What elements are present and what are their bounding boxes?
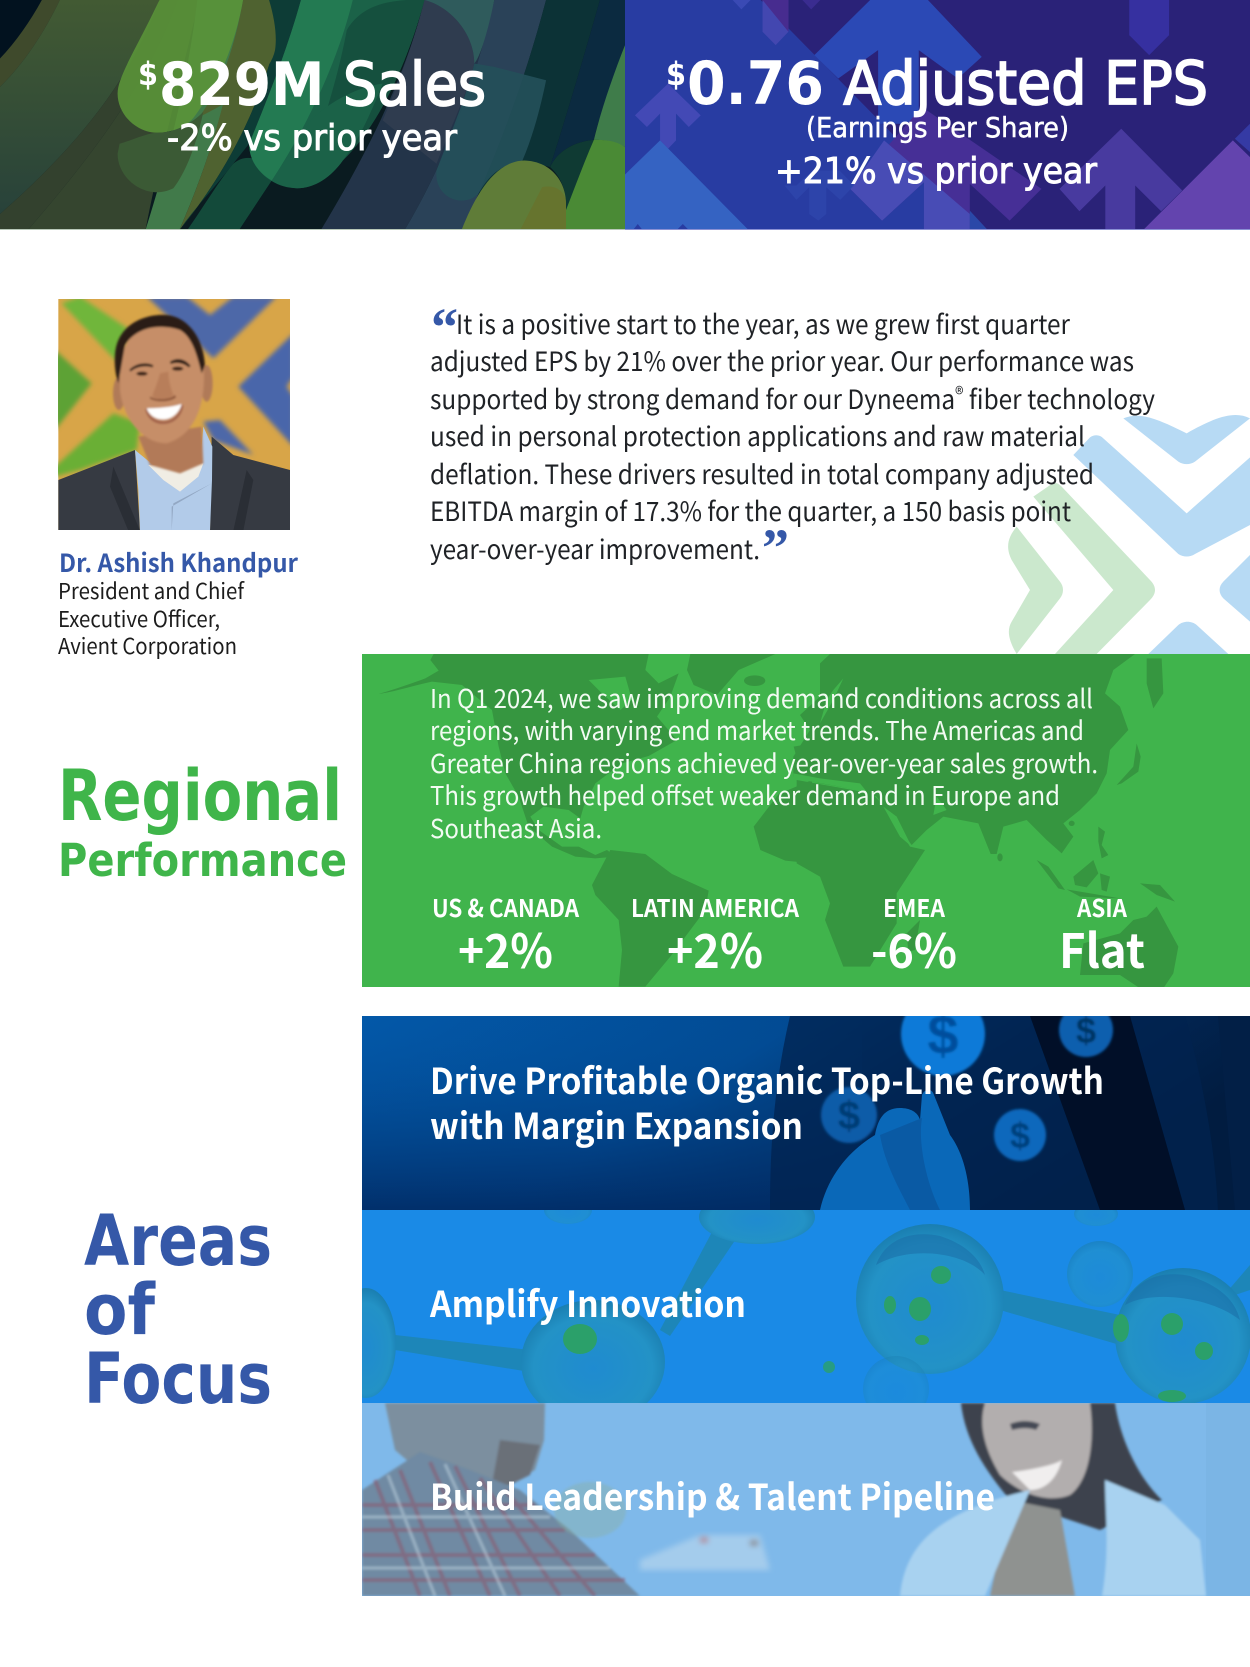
- CEO quote: fiber technology: [963, 378, 1155, 417]
- face: [120, 320, 204, 443]
- CEO quote: deflation. These drivers resulted in total company adjusted: [430, 453, 1094, 492]
- smile: [147, 404, 182, 419]
- stat: EMEA: -6%: [871, 913, 957, 982]
- regional summary text: Greater China regions achieved year-over-year sales growth.: [430, 744, 1098, 781]
- focus area title: Amplify Innovation: [429, 1276, 746, 1328]
- CEO quote: [430, 297, 1155, 578]
- green pill: [249, 0, 425, 188]
- centre arrow: [889, 110, 1042, 220]
- title line 2: Executive Officer,: [58, 602, 220, 634]
- CEO quote: It is a positive start to the year, as we grew first quarter: [456, 303, 1071, 342]
- CEO quote: year-over-year improvement.: [430, 528, 760, 567]
- superscript dollar sign: $: [666, 55, 686, 93]
- opening quote mark: “: [431, 297, 458, 357]
- regional summary text: [430, 679, 1098, 846]
- focus area title: Drive Profitable Organic Top-Line Growth: [430, 1053, 1104, 1105]
- light triangle: [625, 140, 749, 230]
- stat: US and Canada: [434, 898, 580, 968]
- heading: regional performance: Regional: [58, 755, 342, 837]
- panel: focus area talent: [362, 1403, 1250, 1596]
- stat: Asia: ASIA: [1076, 889, 1128, 924]
- lower olive pill: [118, 112, 203, 192]
- CEO quote: EBITDA margin of 17.3% for the quarter, a 150 basis point: [430, 490, 1071, 529]
- EPS change: +21% vs prior year: [775, 151, 1097, 192]
- molecule connectors: [395, 1232, 1250, 1372]
- slate pill: [383, 0, 474, 164]
- panel: regional performance: [362, 654, 1250, 988]
- headline: sales figure: [138, 50, 486, 159]
- CEO quote: supported by strong demand for our Dyneema: [430, 378, 1000, 417]
- focus area title: Build Leadership & Talent Pipeline: [430, 1469, 995, 1521]
- stat: EMEA: EMEA: [883, 889, 946, 924]
- world map: [379, 654, 1178, 988]
- panel: sales header: [0, 0, 625, 230]
- sales change: -2% vs prior year: [167, 118, 457, 159]
- stat: Asia: Flat: [1059, 913, 1145, 982]
- closing quote mark: ”: [762, 518, 789, 578]
- heading: areas of focus: [84, 1200, 272, 1420]
- CEO quote: used in personal protection applications and raw material: [430, 415, 1085, 454]
- superscript dollar sign: $: [138, 55, 158, 93]
- panel: focus area innovation: [362, 1210, 1250, 1403]
- olive pill: [462, 160, 566, 230]
- heading: regional performance: Performance: [58, 834, 347, 887]
- stat: Asia: [1063, 898, 1144, 968]
- undershirt: [148, 463, 203, 492]
- stat: Latin America: [633, 898, 800, 968]
- eyes: [136, 372, 148, 376]
- title line 3: Avient Corporation: [58, 629, 237, 661]
- name: Dr. Ashish Khandpur: [59, 544, 298, 580]
- right triangle: [1143, 140, 1250, 230]
- green atoms: [563, 1266, 1213, 1402]
- blurred desk: [640, 1535, 770, 1570]
- dollar coins: [820, 1016, 1115, 1163]
- background logo mark: [1008, 415, 1250, 654]
- regional summary text: This growth helped offset weaker demand in Europe and: [430, 776, 1060, 813]
- dollar coins: $: [1010, 1115, 1030, 1156]
- stat: US and Canada: US & CANADA: [432, 889, 580, 924]
- CEO quote: ®: [955, 380, 963, 407]
- stat: Latin America: LATIN AMERICA: [631, 889, 800, 924]
- heading: regional performance: [58, 755, 347, 887]
- blue arrow: [814, 0, 982, 124]
- title line 1: President and Chief: [58, 574, 245, 606]
- small arrow: [635, 84, 701, 149]
- right arrow: [1059, 129, 1182, 230]
- sphere highlight: [876, 1234, 985, 1275]
- photo background chevrons: [55, 297, 293, 477]
- headline: EPS figure: [666, 49, 1208, 192]
- jacket: [58, 437, 290, 531]
- panel: EPS header: [625, 0, 1250, 230]
- focus area title: with Margin Expansion: [430, 1098, 803, 1150]
- woman figure: [900, 1403, 1206, 1596]
- heading: areas of focus: Focus: [84, 1338, 272, 1420]
- molecule spheres: [336, 1190, 1250, 1424]
- panel: focus area growth: [362, 1016, 1250, 1210]
- regional summary text: Southeast Asia.: [430, 809, 602, 846]
- ears: [113, 377, 125, 410]
- CEO quote: adjusted EPS by 21% over the prior year. Our performance was: [430, 340, 1134, 379]
- suit: [770, 1016, 1218, 1210]
- regional summary text: regions, with varying end market trends. The Americas and: [430, 711, 1084, 748]
- sales value: 829M Sales: [159, 50, 486, 120]
- EPS value: 0.76 Adjusted EPS: [687, 49, 1208, 119]
- dollar coins: $: [1076, 1010, 1096, 1051]
- regional summary text: In Q1 2024, we saw improving demand conditions across all: [430, 679, 1093, 716]
- stat: Latin America: +2%: [667, 913, 763, 982]
- brows: [129, 359, 191, 372]
- dollar coins: $: [927, 1003, 959, 1066]
- focus area title: [430, 1064, 1102, 1148]
- hand: [820, 1090, 970, 1210]
- stat: US and Canada: +2%: [458, 913, 553, 982]
- man figure: [362, 1403, 640, 1596]
- portrait photo: [55, 297, 293, 531]
- heading: areas of focus: of: [84, 1269, 156, 1351]
- hair: [115, 315, 205, 383]
- executive name and title: [58, 544, 298, 661]
- EPS definition: (Earnings Per Share): [806, 111, 1069, 144]
- nose: [153, 372, 173, 399]
- stat: EMEA: [873, 899, 956, 968]
- shirt: [135, 427, 212, 531]
- heading: areas of focus: Areas: [84, 1200, 272, 1282]
- lime pill: [118, 0, 243, 133]
- dollar coins: $: [838, 1094, 860, 1138]
- neck: [138, 427, 203, 473]
